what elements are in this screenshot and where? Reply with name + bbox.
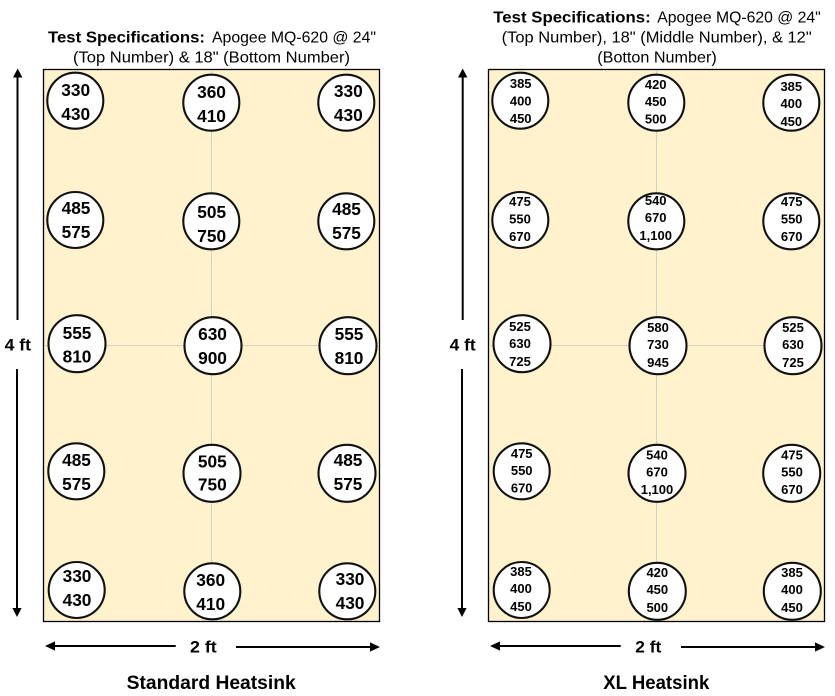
reading: xl row 5 right: 385 <box>781 565 803 580</box>
reading: xl row 3 right <box>764 317 822 374</box>
heading: xl test specifications: Test Specifications: <box>493 10 651 27</box>
heading: standard test specifications: Apogee MQ-620 @ 24" <box>212 30 376 47</box>
reading: row 1 left: 430 <box>61 104 90 124</box>
heading: standard test specifications: Test Specifications: <box>48 30 205 47</box>
title: standard heatsink: Standard Heatsink <box>127 673 296 694</box>
reading: row 4 center <box>184 445 240 502</box>
reading: xl row 3 right: 525 <box>782 320 804 335</box>
reading: xl row 1 right: 400 <box>780 96 802 111</box>
reading: row 5 left <box>49 562 105 618</box>
reading: xl row 3 right: 725 <box>782 355 804 370</box>
reading: xl row 1 left: 400 <box>510 93 532 108</box>
reading: xl row 2 center <box>628 193 684 249</box>
heading: xl test specifications <box>493 10 821 67</box>
reading: row 2 right: 575 <box>332 223 361 243</box>
reading: row 3 right <box>320 317 376 374</box>
reading: xl row 4 center <box>628 445 686 502</box>
reading: xl row 2 right: 550 <box>781 211 803 226</box>
reading: xl row 5 left: 450 <box>510 599 532 614</box>
reading: row 2 left: 575 <box>62 222 91 242</box>
heading: standard test specifications: (Top Number) & 18" (Bottom Number) <box>73 50 350 67</box>
reading: row 1 left: 330 <box>61 80 90 100</box>
reading: xl row 1 center <box>628 75 684 131</box>
reading: xl row 2 right: 670 <box>781 229 803 244</box>
reading: xl row 3 left: 630 <box>509 336 531 351</box>
heading: xl test specifications: (Botton Number) <box>597 50 717 67</box>
reading: row 4 right: 575 <box>334 474 363 494</box>
reading: xl row 1 center: 420 <box>645 77 667 92</box>
reading: row 5 center: 360 <box>196 570 225 590</box>
reading: xl row 2 left: 475 <box>509 194 531 209</box>
reading: row 3 right: 810 <box>335 348 363 368</box>
reading: xl row 4 left: 670 <box>511 481 533 496</box>
reading: xl row 4 left: 475 <box>511 446 533 461</box>
reading: row 4 center: 505 <box>198 451 227 471</box>
reading: row 5 center: 410 <box>196 594 225 614</box>
reading: row 1 right <box>318 75 374 131</box>
reading: row 2 left: 485 <box>62 198 91 218</box>
reading: row 4 right <box>318 445 376 502</box>
reading: xl row 5 center: 420 <box>646 565 668 580</box>
reading: xl row 3 right: 630 <box>782 337 804 352</box>
reading: xl row 5 center <box>629 563 686 620</box>
reading: row 3 center: 900 <box>198 348 227 368</box>
standard light footprint area <box>44 70 380 622</box>
reading: row 5 center <box>184 563 240 619</box>
dimension: 4 ft height <box>5 68 31 617</box>
dimension: 2 ft width <box>45 638 380 657</box>
heading: xl test specifications: (Top Number), 18" (Middle Number), & 12" <box>502 30 812 47</box>
reading: row 3 center <box>184 317 242 374</box>
reading: row 3 left: 555 <box>63 323 92 343</box>
reading: row 5 right <box>319 563 375 619</box>
reading: xl row 2 center: 1,100 <box>639 228 672 243</box>
reading: xl row 5 left: 400 <box>510 581 532 596</box>
reading: row 2 center: 505 <box>197 202 227 222</box>
reading: row 4 right: 485 <box>334 450 363 470</box>
reading: row 2 center <box>183 193 239 249</box>
title: xl heatsink: XL Heatsink <box>603 673 710 694</box>
reading: xl row 2 left: 670 <box>509 229 531 244</box>
reading: xl row 3 left: 725 <box>509 354 531 369</box>
reading: row 1 center: 410 <box>197 106 226 126</box>
reading: xl row 1 right: 450 <box>780 114 802 129</box>
heading: xl test specifications: Apogee MQ-620 @ 24" <box>657 10 821 27</box>
reading: row 5 right: 330 <box>336 569 364 589</box>
reading: row 3 left <box>48 315 106 372</box>
reading: xl row 1 left: 450 <box>510 111 532 126</box>
dimension: xl 2 ft width: 2 ft <box>635 638 662 657</box>
reading: xl row 2 center: 540 <box>645 193 667 208</box>
reading: xl row 1 left: 385 <box>510 76 532 91</box>
reading: xl row 4 right: 550 <box>781 464 803 479</box>
reading: xl row 3 center: 730 <box>647 337 669 352</box>
reading: xl row 3 left <box>494 315 550 372</box>
reading: xl row 4 right: 475 <box>781 447 803 462</box>
reading: row 5 right: 430 <box>336 593 364 613</box>
panel: xl heatsink <box>450 10 825 694</box>
reading: xl row 1 center: 500 <box>645 112 667 127</box>
reading: xl row 1 right <box>763 75 819 131</box>
reading: xl row 4 right: 670 <box>781 482 803 497</box>
reading: xl row 4 center: 670 <box>646 464 668 479</box>
dimension: xl 4 ft height <box>450 68 476 617</box>
reading: xl row 4 center: 1,100 <box>641 482 673 497</box>
reading: row 1 left <box>47 73 103 129</box>
dimension: xl 2 ft width <box>490 638 825 657</box>
reading: row 4 center: 750 <box>198 475 227 495</box>
reading: xl row 1 center: 450 <box>645 94 667 109</box>
reading: row 4 left: 575 <box>62 474 91 494</box>
reading: row 3 left: 810 <box>63 347 91 367</box>
reading: xl row 5 center: 500 <box>646 600 668 615</box>
reading: xl row 5 right: 450 <box>781 600 803 615</box>
reading: row 2 center: 750 <box>197 226 226 246</box>
reading: xl row 3 center: 945 <box>647 355 669 370</box>
dimension: 4 ft height: 4 ft <box>5 336 31 355</box>
panel: standard heatsink <box>5 30 380 694</box>
reading: row 1 center: 360 <box>197 82 226 102</box>
reading: row 4 left <box>48 443 104 499</box>
reading: row 1 right: 330 <box>334 81 363 101</box>
reading: row 1 right: 430 <box>334 105 363 125</box>
reading: row 2 right <box>318 193 374 249</box>
reading: row 2 left <box>47 192 103 248</box>
reading: xl row 3 left: 525 <box>509 319 531 334</box>
xl light footprint area <box>488 70 824 622</box>
reading: row 1 center <box>183 75 239 131</box>
reading: xl row 3 center: 580 <box>647 320 669 335</box>
reading: xl row 1 right: 385 <box>780 79 802 94</box>
reading: xl row 2 left: 550 <box>509 211 531 226</box>
reading: xl row 2 right: 475 <box>781 194 803 209</box>
reading: xl row 2 right <box>763 193 819 249</box>
reading: xl row 3 center <box>630 317 686 374</box>
reading: xl row 5 right: 400 <box>781 582 803 597</box>
reading: xl row 2 center: 670 <box>645 210 667 225</box>
reading: xl row 5 right <box>764 563 821 620</box>
reading: row 3 right: 555 <box>335 324 364 344</box>
reading: row 3 center: 630 <box>198 324 227 344</box>
reading: xl row 4 right <box>763 445 820 502</box>
dimension: 2 ft width: 2 ft <box>190 638 217 657</box>
reading: row 4 left: 485 <box>62 450 91 470</box>
reading: xl row 2 left <box>492 192 548 248</box>
reading: xl row 4 left: 550 <box>511 463 533 478</box>
reading: row 2 right: 485 <box>332 199 361 219</box>
reading: xl row 5 left <box>494 562 550 618</box>
reading: row 5 left: 330 <box>63 566 91 586</box>
reading: xl row 5 center: 450 <box>646 582 668 597</box>
heading: standard test specifications <box>48 30 376 67</box>
dimension: xl 4 ft height: 4 ft <box>450 336 476 355</box>
reading: xl row 1 left <box>492 73 548 129</box>
reading: xl row 4 center: 540 <box>646 447 668 462</box>
reading: row 5 left: 430 <box>63 590 91 610</box>
reading: xl row 4 left <box>494 443 550 499</box>
reading: xl row 5 left: 385 <box>510 564 532 579</box>
